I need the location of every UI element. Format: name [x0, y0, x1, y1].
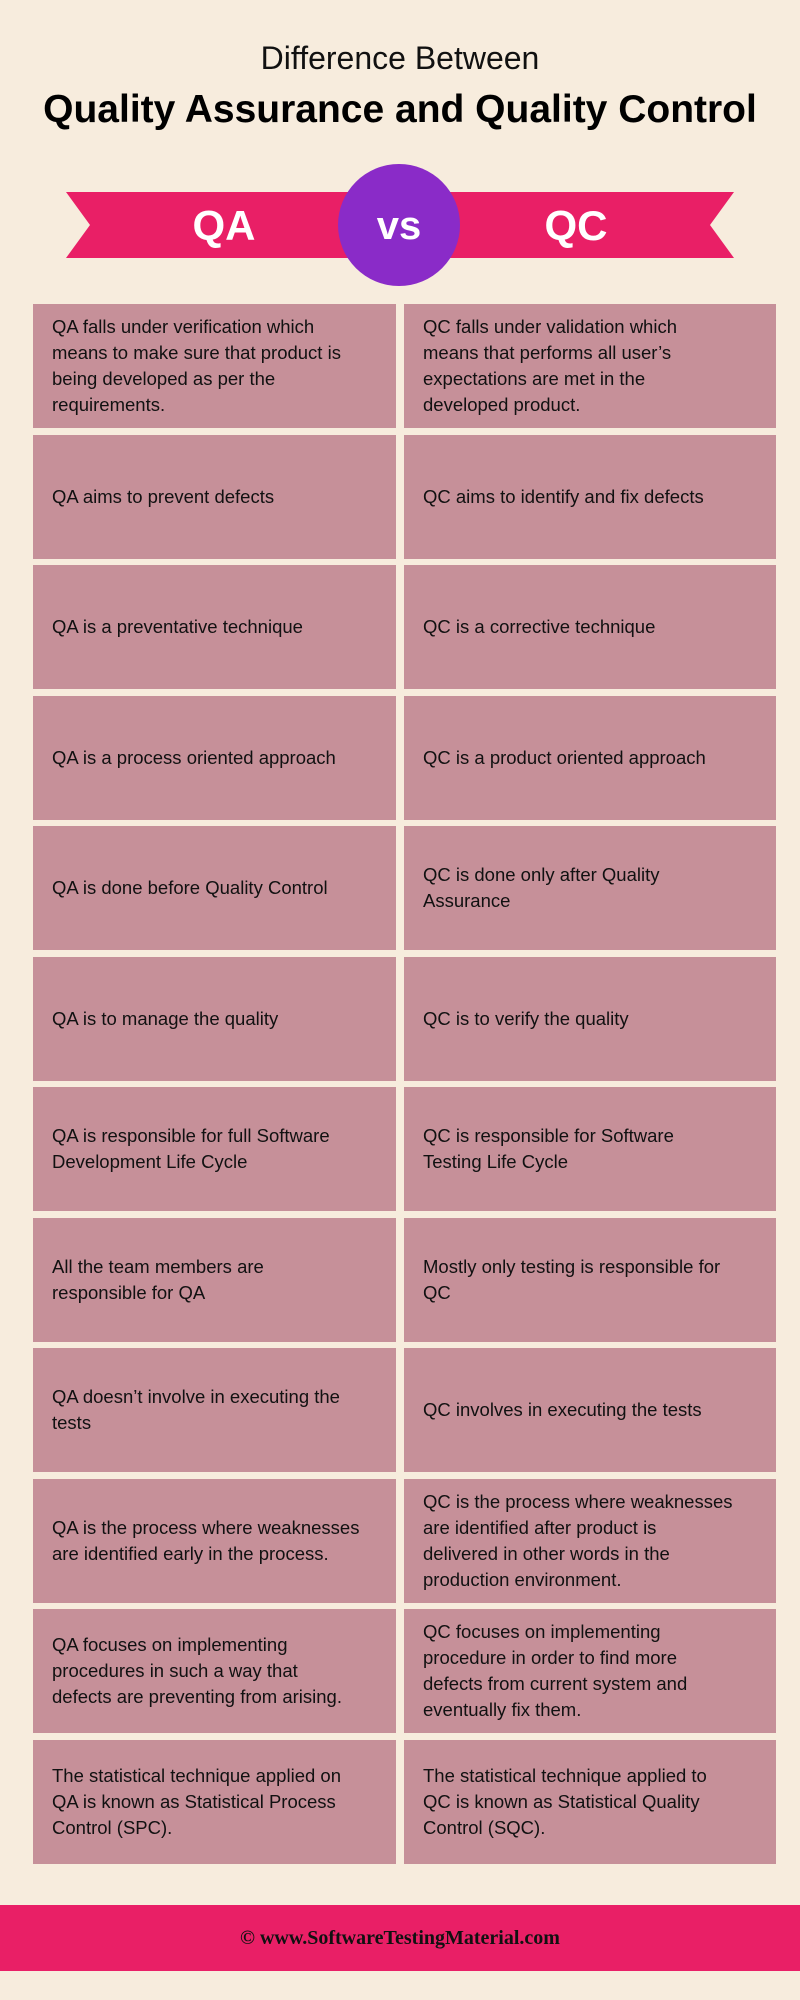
- comparison table: QA is done before Quality Control: [52, 877, 328, 898]
- comparison table: delivered in other words in the: [423, 1542, 670, 1564]
- comparison table: [33, 304, 776, 1864]
- comparison table: QA is the process where weaknesses are identified early in the process.: [52, 1516, 359, 1564]
- comparison table: QA is to manage the quality: [52, 1008, 278, 1028]
- comparison table: All the team members are responsible for QA: [52, 1256, 264, 1302]
- comparison table: The statistical technique applied on QA is known as Statistical Process Control (SPC).: [52, 1764, 341, 1838]
- ribbon left: QA: [192, 202, 256, 249]
- ribbon left: [66, 192, 360, 258]
- ribbon right: [440, 192, 734, 258]
- comparison table: QC focuses on implementing procedure in order to find more defects from current system and eventually fix them.: [423, 1621, 687, 1720]
- comparison table: are identified after product is: [423, 1516, 656, 1538]
- comparison table: QC involves in executing the tests: [423, 1399, 702, 1420]
- comparison table: QC is the process where weaknesses: [423, 1490, 732, 1512]
- comparison table: QC is to verify the quality: [423, 1008, 629, 1028]
- vs circle: [338, 164, 460, 286]
- comparison table: QC is done only after Quality Assurance: [423, 864, 660, 911]
- comparison table: QA is a preventative technique: [52, 616, 303, 637]
- comparison table: QA doesn’t involve in executing the tests: [52, 1386, 340, 1433]
- comparison table: QA is a process oriented approach: [52, 746, 336, 768]
- comparison table: The statistical technique applied to QC is known as Statistical Quality Control (SQC).: [423, 1764, 707, 1838]
- title: Difference Between: [261, 40, 539, 76]
- row 1: [33, 304, 396, 428]
- comparison table: production environment.: [423, 1568, 621, 1590]
- comparison table: QA focuses on implementing procedures in such a way that defects are preventing from arising.: [52, 1634, 342, 1707]
- footer: © www.SoftwareTestingMaterial.com: [240, 1926, 560, 1948]
- comparison table: Mostly only testing is responsible for QC: [423, 1256, 720, 1302]
- comparison table: QC is a corrective technique: [423, 616, 655, 637]
- comparison table: QC is a product oriented approach: [423, 746, 706, 768]
- subtitle heading: Quality Assurance and Quality Control: [43, 88, 757, 131]
- comparison table: QA is responsible for full Software Development Life Cycle: [52, 1125, 330, 1172]
- ribbon right: QC: [544, 202, 608, 249]
- comparison table: QA aims to prevent defects: [52, 486, 274, 506]
- comparison table: QC is responsible for Software Testing Life Cycle: [423, 1125, 674, 1172]
- row 1: QA falls under verification which means to make sure that product is being developed as per the requirements.: [52, 316, 341, 415]
- banner: QA vs QC: [66, 164, 734, 286]
- vs circle: vs: [377, 204, 421, 248]
- comparison table: QC aims to identify and fix defects: [423, 486, 704, 506]
- comparison table: QC falls under validation which means that performs all user’s expectations are met in the developed product.: [423, 316, 677, 415]
- footer: [0, 1905, 800, 1971]
